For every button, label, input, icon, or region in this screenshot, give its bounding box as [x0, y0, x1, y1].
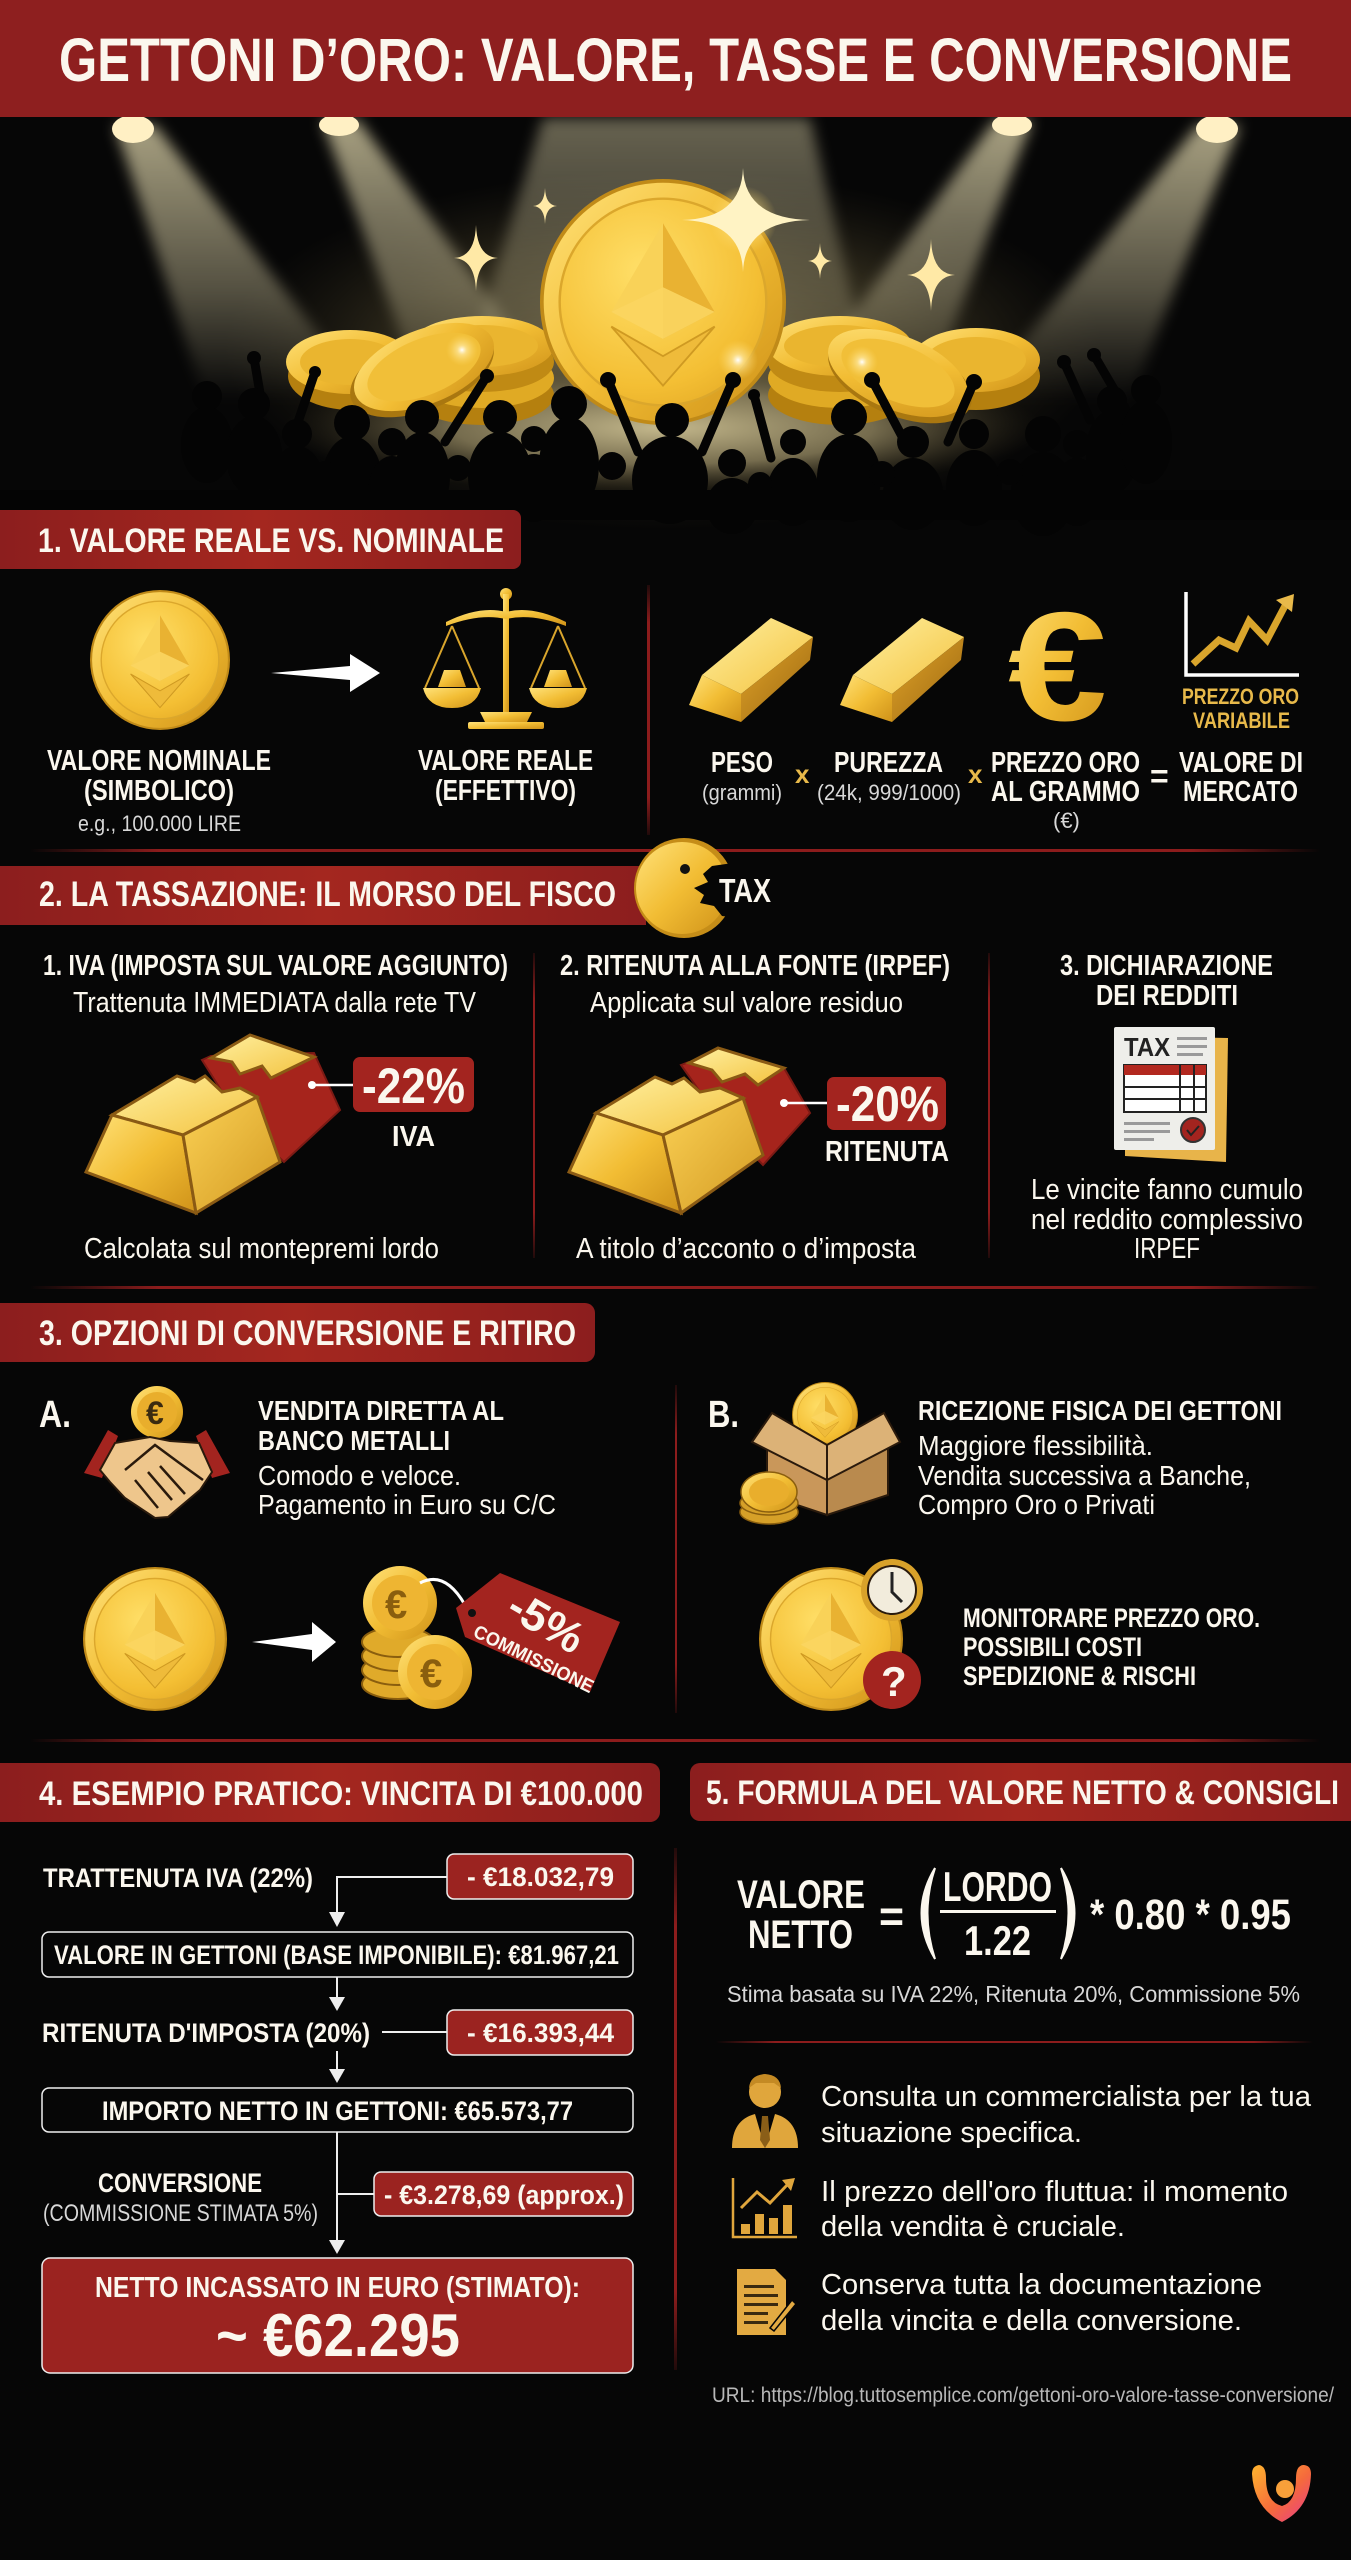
option B: ricezione fisica: B.	[708, 1394, 739, 1436]
column: dichiarazione: IRPEF	[1134, 1233, 1200, 1265]
glow behind coins	[223, 170, 1103, 530]
option A: vendita diretta: A.	[39, 1394, 71, 1436]
badge: -20%	[780, 1076, 949, 1168]
formula note: Stima basata su IVA 22%, Ritenuta 20%, Commissione 5%	[727, 1981, 1300, 2007]
option B: ricezione fisica: POSSIBILI COSTI	[963, 1632, 1142, 1662]
arrow: nominal to real	[271, 654, 380, 692]
section 3 heading	[0, 1303, 595, 1362]
icon: handshake	[84, 1430, 230, 1518]
formula: valore netto: =	[879, 1892, 904, 1941]
tip: commercialista	[732, 2074, 1312, 2149]
icon: euro coin	[131, 1386, 183, 1438]
step: conversione: CONVERSIONE	[98, 2168, 262, 2198]
sparkles	[446, 168, 955, 380]
icon: euro coin: €	[146, 1395, 164, 1431]
tip: prezzo dell'oro	[733, 2176, 1288, 2243]
label: valore reale	[418, 745, 593, 807]
icon: bitten gold bar 20%	[569, 1048, 810, 1213]
market value formula: PESO	[711, 747, 773, 779]
chart: prezzo oro variabile	[1182, 592, 1299, 733]
left coin pile	[286, 305, 554, 436]
column: ritenuta	[560, 950, 950, 1265]
option A: vendita diretta: Comodo e veloce.	[258, 1460, 461, 1491]
chart: prezzo oro variabile: PREZZO ORO	[1182, 684, 1299, 709]
label: valore nominale: (SIMBOLICO)	[84, 775, 234, 807]
option A: vendita diretta: Pagamento in Euro su C/C	[258, 1489, 556, 1520]
section 5: formula e consigli	[674, 1763, 1351, 2522]
icon: nominal coin	[90, 590, 230, 730]
label: valore nominale: VALORE NOMINALE	[47, 745, 271, 777]
icon: coin	[83, 1567, 227, 1711]
icon: coin stack with euro	[362, 1566, 472, 1709]
step: conversione	[43, 2168, 633, 2227]
title banner	[0, 0, 1351, 117]
market value formula: (€)	[1053, 808, 1080, 833]
icon: tax form: TAX	[1124, 1032, 1171, 1062]
market value formula: (grammi)	[702, 780, 782, 805]
market value formula: AL GRAMMO	[991, 776, 1140, 808]
tip: documentazione: Conserva tutta la documentazione	[821, 2269, 1262, 2301]
column: IVA: Trattenuta IMMEDIATA dalla rete TV	[73, 987, 477, 1019]
step: trattenuta IVA	[43, 1854, 633, 1899]
market value formula: PUREZZA	[834, 747, 943, 779]
column: IVA: Calcolata sul montepremi lordo	[84, 1233, 439, 1265]
icon: coin with clock and question mark: ?	[881, 1658, 907, 1705]
section 2 heading	[0, 866, 646, 925]
step: valore in gettoni	[42, 1932, 633, 1977]
section 4: esempio pratico	[0, 1763, 660, 2373]
column: IVA	[43, 950, 508, 1265]
icon: document with pen	[737, 2269, 796, 2335]
right coin pile	[768, 311, 1040, 442]
section 1: valore reale vs nominale	[0, 510, 1303, 836]
option B: ricezione fisica: Maggiore flessibilità.	[918, 1430, 1153, 1461]
option B: ricezione fisica	[708, 1382, 1282, 1711]
market value formula: VALORE DI	[1179, 747, 1303, 779]
icon: euro symbol: €	[1008, 580, 1107, 753]
formula: valore netto: * 0.80 * 0.95	[1090, 1891, 1291, 1939]
section 3 heading: 3. OPZIONI DI CONVERSIONE E RITIRO	[39, 1314, 576, 1353]
tag: -5% commissione	[420, 1573, 620, 1698]
formula: valore netto: LORDO	[943, 1863, 1052, 1910]
formula: valore netto: 1.22	[964, 1917, 1031, 1964]
badge: -22%	[308, 1057, 474, 1153]
market value formula: x	[968, 759, 983, 789]
main coin	[540, 179, 786, 425]
icon: coin bitten with tax: TAX	[719, 872, 771, 909]
chart: prezzo oro variabile: VARIABILE	[1193, 708, 1290, 733]
column: dichiarazione: Le vincite fanno cumulo	[1031, 1174, 1303, 1206]
icon: bitten gold bar 22%	[86, 1035, 340, 1213]
section 2 heading: 2. LA TASSAZIONE: IL MORSO DEL FISCO	[39, 875, 616, 914]
market value formula: x	[795, 759, 810, 789]
column: dichiarazione	[1031, 950, 1303, 1265]
icon: box with coins	[740, 1382, 900, 1524]
section 4 heading: 4. ESEMPIO PRATICO: VINCITA DI €100.000	[39, 1775, 643, 1813]
badge: -20%: -20%	[836, 1076, 939, 1132]
formula: valore netto	[737, 1863, 1291, 1964]
option B: ricezione fisica: Vendita successiva a Banche,	[918, 1460, 1251, 1491]
formula: valore netto: NETTO	[748, 1913, 853, 1957]
badge: -20%: RITENUTA	[825, 1136, 949, 1168]
option B: ricezione fisica: RICEZIONE FISICA DEI GETTONI	[918, 1395, 1282, 1426]
logo	[1252, 2465, 1311, 2522]
tip: prezzo dell'oro: Il prezzo dell'oro fluttua: il momento	[821, 2176, 1288, 2208]
result: netto incassato: ~ €62.295	[216, 2302, 460, 2369]
column: dichiarazione: DEI REDDITI	[1096, 980, 1238, 1012]
icon: bar chart growth	[733, 2178, 797, 2237]
icon: gold bar purezza	[840, 618, 964, 722]
icon: coin bitten with tax	[634, 838, 771, 938]
step: ritenuta d'imposta: RITENUTA D'IMPOSTA (20%)	[42, 2018, 370, 2048]
column: dichiarazione: 3. DICHIARAZIONE	[1060, 950, 1273, 982]
step: conversione: - €3.278,69 (approx.)	[384, 2180, 624, 2210]
crowd silhouette	[0, 348, 1351, 536]
market value formula: PREZZO ORO	[991, 747, 1140, 779]
label: valore nominale	[47, 745, 271, 836]
column: ritenuta: A titolo d’acconto o d’imposta	[576, 1233, 917, 1265]
icon: coin with clock and question mark	[759, 1559, 923, 1711]
section 1 heading	[0, 510, 521, 569]
icon: scales	[423, 588, 587, 729]
step: trattenuta IVA: - €18.032,79	[467, 1862, 614, 1892]
section 2: la tassazione	[0, 838, 1303, 1265]
section 5 heading	[690, 1763, 1351, 1821]
tip: documentazione: della vincita e della conversione.	[821, 2305, 1242, 2337]
result: netto incassato: NETTO INCASSATO IN EURO (STIMATO):	[95, 2272, 580, 2304]
tag: -5% commissione: -5%	[499, 1581, 593, 1664]
icon: coin stack with euro: €	[385, 1583, 407, 1627]
option A: vendita diretta	[39, 1386, 620, 1711]
icon: tax form	[1114, 1027, 1228, 1162]
icon: coin stack with euro: €	[420, 1652, 442, 1696]
market value formula: =	[1150, 758, 1169, 794]
section 4 heading	[0, 1763, 660, 1822]
result: netto incassato	[42, 2258, 633, 2373]
column: ritenuta: 2. RITENUTA ALLA FONTE (IRPEF)	[560, 950, 950, 982]
formula: valore netto: VALORE	[737, 1873, 865, 1917]
label: valore nominale: e.g., 100.000 LIRE	[78, 811, 241, 836]
tip: prezzo dell'oro: della vendita è cruciale.	[821, 2211, 1125, 2243]
flow connectors and arrows	[329, 1877, 447, 2254]
option B: ricezione fisica: MONITORARE PREZZO ORO.	[963, 1603, 1260, 1633]
option A: vendita diretta: BANCO METALLI	[258, 1425, 450, 1456]
badge: -22%: IVA	[392, 1121, 435, 1153]
section 1 heading: 1. VALORE REALE VS. NOMINALE	[38, 522, 504, 560]
label: valore reale: (EFFETTIVO)	[435, 775, 576, 807]
column: IVA: 1. IVA (IMPOSTA SUL VALORE AGGIUNTO)	[43, 950, 508, 982]
step: valore in gettoni: VALORE IN GETTONI (BASE IMPONIBILE): €81.967,21	[54, 1940, 619, 1970]
label: valore reale: VALORE REALE	[418, 745, 593, 777]
option B: ricezione fisica: SPEDIZIONE & RISCHI	[963, 1661, 1196, 1691]
tip: commercialista: Consulta un commercialista per la tua	[821, 2081, 1312, 2113]
option B: ricezione fisica: Compro Oro o Privati	[918, 1489, 1155, 1520]
market value formula: MERCATO	[1183, 776, 1298, 808]
icon: accountant	[732, 2074, 798, 2148]
step: ritenuta d'imposta	[42, 2010, 633, 2055]
step: ritenuta d'imposta: - €16.393,44	[467, 2018, 614, 2048]
tip: documentazione	[737, 2269, 1262, 2337]
step: conversione: (COMMISSIONE STIMATA 5%)	[43, 2200, 318, 2227]
market value formula: (24k, 999/1000)	[817, 780, 961, 805]
step: importo netto	[42, 2088, 633, 2132]
arrow: to commission	[252, 1622, 336, 1662]
stage floor light	[283, 362, 1043, 494]
step: importo netto: IMPORTO NETTO IN GETTONI: €65.573,77	[102, 2096, 573, 2126]
tip: commercialista: situazione specifica.	[821, 2117, 1082, 2149]
step: trattenuta IVA: TRATTENUTA IVA (22%)	[43, 1863, 313, 1893]
icon: gold bar peso	[689, 618, 813, 722]
tag: -5% commissione: COMMISSIONE	[470, 1622, 597, 1698]
section 3: opzioni di conversione	[0, 1303, 1282, 1713]
option A: vendita diretta: VENDITA DIRETTA AL	[258, 1395, 504, 1426]
market value formula	[702, 747, 1303, 833]
spotlights	[115, 118, 1240, 420]
badge: -22%: -22%	[362, 1058, 465, 1114]
column: ritenuta: Applicata sul valore residuo	[590, 987, 903, 1019]
hero illustration: spotlights, coins and crowd	[0, 0, 1351, 536]
column: dichiarazione: nel reddito complessivo	[1031, 1204, 1303, 1236]
